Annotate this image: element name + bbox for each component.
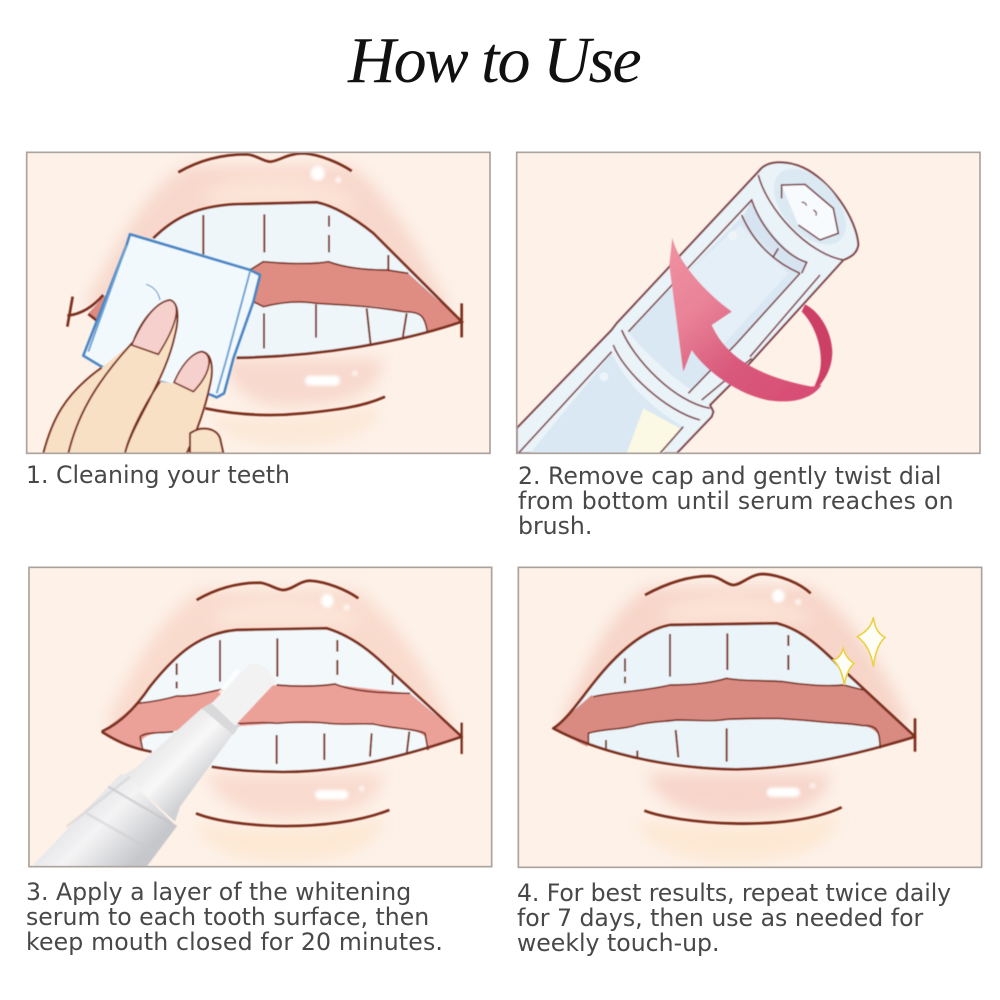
- teeth and gum: [574, 624, 880, 769]
- panel: step 4 results: [518, 566, 982, 868]
- caption: step 3: serum to each tooth surface, then: [26, 903, 429, 931]
- caption: step 3: keep mouth closed for 20 minutes.: [26, 928, 443, 956]
- teeth and gum: [140, 628, 441, 772]
- caption: step 4: weekly touch-up.: [517, 929, 720, 957]
- napkin and hand: [43, 234, 260, 453]
- lips: [102, 581, 462, 862]
- icon: sparkles: [833, 617, 885, 685]
- caption: step 4: for 7 days, then use as needed for: [517, 904, 923, 932]
- pen applicator: [32, 663, 275, 867]
- lips: [553, 574, 915, 862]
- panel: step 1 cleaning: [26, 152, 491, 454]
- caption: step 4: 4. For best results, repeat twice daily: [517, 879, 951, 907]
- caption: step 4: [517, 879, 951, 957]
- lips: [67, 153, 462, 445]
- caption: step 2: from bottom until serum reaches on: [518, 487, 954, 515]
- teeth and gum: [88, 202, 462, 358]
- caption: step 1: 1. Cleaning your teeth: [26, 461, 290, 489]
- panel: step 2 twist dial: [516, 152, 981, 454]
- panel: step 3 apply serum: [28, 566, 492, 868]
- caption: step 2: [518, 462, 954, 540]
- pen body: [517, 155, 860, 453]
- caption: step 2: brush.: [518, 512, 592, 540]
- caption: step 3: [26, 878, 443, 956]
- title: How to Use: [348, 24, 640, 97]
- caption: step 2: 2. Remove cap and gently twist dial: [518, 462, 941, 490]
- icon: twist arrow: [669, 238, 832, 401]
- caption: step 3: 3. Apply a layer of the whitening: [26, 878, 411, 906]
